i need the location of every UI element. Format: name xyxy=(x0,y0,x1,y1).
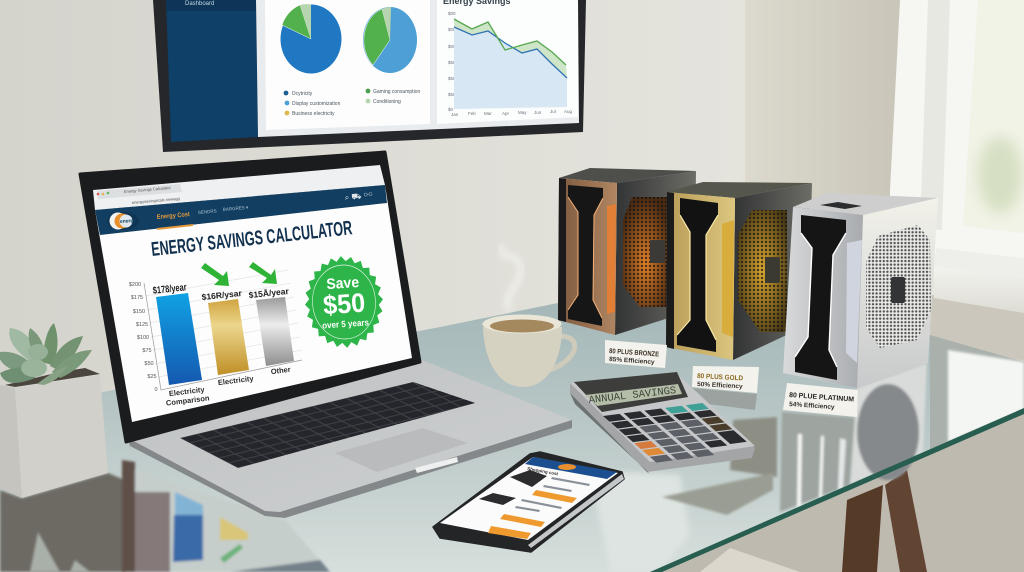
product thumbnail 2 xyxy=(479,493,516,505)
trackpad xyxy=(335,428,468,472)
top xyxy=(793,193,938,215)
PSU platinum xyxy=(783,193,938,388)
label platinum: 80 PLUE PLATINUM xyxy=(789,392,854,404)
laptop base xyxy=(128,360,572,518)
window xyxy=(890,0,1024,313)
monitor content area xyxy=(256,0,579,137)
calculator xyxy=(570,372,756,474)
reflected window shapes xyxy=(30,532,90,572)
grid lines xyxy=(145,270,302,377)
top xyxy=(559,168,696,183)
savings badge xyxy=(302,253,386,351)
category labels: Electricity xyxy=(217,374,255,387)
bar 3 xyxy=(256,297,294,366)
I shape xyxy=(677,198,718,352)
line chart axis labels: $50 xyxy=(448,60,456,65)
LED strip xyxy=(607,204,616,314)
gold PSU reflection xyxy=(662,417,777,515)
PSU bronze xyxy=(558,168,696,335)
platinum PSU reflection xyxy=(780,363,927,512)
concrete pot xyxy=(0,368,108,498)
monitor sidebar xyxy=(166,0,258,142)
lighter streak xyxy=(590,470,690,572)
line chart axis labels: Aug xyxy=(564,109,573,114)
line chart area xyxy=(454,19,567,78)
screen title: ENERGY SAVINGS CALCULATOR xyxy=(150,217,354,261)
gold label reflection xyxy=(692,388,757,410)
nav bar: Energy Cost xyxy=(157,211,191,221)
savings badge: Save xyxy=(326,275,360,293)
glow lines xyxy=(706,215,718,340)
logo: energy xyxy=(120,218,137,225)
axis labels: $200 xyxy=(129,282,141,288)
line chart axis labels xyxy=(448,11,573,117)
front xyxy=(783,207,863,388)
coffee xyxy=(490,320,554,332)
cup handle xyxy=(550,336,575,370)
fan xyxy=(866,225,931,348)
laptop lid bezel xyxy=(80,152,420,442)
pie legend xyxy=(284,89,420,117)
bar values: $178/year xyxy=(152,282,187,297)
phone title: Shopping cost xyxy=(527,466,559,476)
pie legend: Dcytricity xyxy=(292,91,313,97)
bar values: $16R/ysar xyxy=(201,288,243,302)
LCD xyxy=(585,384,682,406)
laptop screen xyxy=(95,185,412,422)
pie chart 2 xyxy=(363,7,417,73)
baseboard xyxy=(700,548,800,572)
table leg xyxy=(885,470,927,572)
glow lines xyxy=(795,233,812,357)
keyboard xyxy=(180,382,475,468)
sidebar label: Dashboard xyxy=(185,1,214,7)
glow lines xyxy=(677,215,690,335)
line chart axis labels: Jul xyxy=(550,109,556,114)
browser chrome: Energy Savings Calculator xyxy=(124,185,172,194)
line chart axis labels: $50 xyxy=(448,92,456,97)
glass lower left dark under pot xyxy=(0,473,125,572)
pie legend: Gaming consumption xyxy=(373,89,420,95)
label bronze: 80 PLUS BRONZE xyxy=(609,348,659,359)
front xyxy=(558,178,617,335)
blue line xyxy=(454,27,567,78)
green line xyxy=(454,19,566,65)
potted plant xyxy=(0,323,108,498)
front notch xyxy=(415,457,458,473)
coffee cup xyxy=(482,245,575,387)
fan xyxy=(623,197,668,307)
vent xyxy=(820,202,862,209)
category labels: Comparison xyxy=(165,393,210,408)
glass front edge xyxy=(650,408,1024,572)
window pane xyxy=(963,0,1024,233)
axis labels: $150 xyxy=(133,309,145,315)
laptop xyxy=(80,152,572,518)
PSU reflections in glass xyxy=(662,363,927,515)
savings badge: $50 xyxy=(322,287,366,321)
side xyxy=(857,198,938,388)
line chart axis labels: Feb xyxy=(468,111,476,116)
table leg xyxy=(842,485,883,572)
pie chart panel xyxy=(265,0,430,130)
label bronze: 85% Efficiency xyxy=(609,356,655,366)
glass desk xyxy=(0,303,1024,572)
category labels: Electricity xyxy=(168,385,206,398)
browser chrome xyxy=(93,165,385,210)
line chart axis labels: $00 xyxy=(448,11,456,16)
label platinum xyxy=(783,383,858,417)
label platinum: 54% Efficiency xyxy=(789,401,835,411)
axis labels: $25 xyxy=(147,374,157,380)
product text xyxy=(515,477,590,512)
smartphone xyxy=(433,452,624,552)
glow lines xyxy=(568,197,578,310)
fan xyxy=(738,210,787,332)
monitor on wall xyxy=(153,0,586,152)
axis labels: $75 xyxy=(142,348,152,354)
I shape xyxy=(568,185,603,326)
product thumbnail 1 xyxy=(510,470,547,487)
badge xyxy=(765,257,780,283)
steam xyxy=(502,245,521,310)
axis labels: 0 xyxy=(154,387,158,393)
buy button 3 xyxy=(488,526,531,539)
I shape xyxy=(795,215,846,380)
phone logo xyxy=(558,464,576,470)
keypad xyxy=(603,403,756,463)
label gold xyxy=(692,366,759,393)
window reflection xyxy=(930,335,1024,455)
floor and table legs xyxy=(650,405,1024,572)
LED strip xyxy=(722,220,734,337)
front xyxy=(666,192,735,360)
display surround xyxy=(574,372,688,412)
label bronze xyxy=(605,340,667,368)
monitor frame xyxy=(153,0,586,152)
phone body xyxy=(433,452,624,552)
label gold: 80 PLUS GOLD xyxy=(697,373,743,382)
pie legend: Display customization xyxy=(292,101,341,107)
axis labels: $100 xyxy=(137,335,149,341)
succulent xyxy=(0,323,92,385)
line chart axis labels: Jan xyxy=(451,112,459,117)
foliage xyxy=(978,137,1022,213)
line chart axis labels: $00 xyxy=(448,27,456,32)
line chart axis labels: Mar xyxy=(484,111,492,116)
cup body xyxy=(483,327,562,387)
category labels xyxy=(165,365,291,408)
bar chart xyxy=(129,270,302,408)
logo xyxy=(107,212,139,230)
badge xyxy=(891,277,905,303)
down arrow 1 xyxy=(201,263,229,286)
top xyxy=(667,182,812,198)
nav bar xyxy=(95,185,387,235)
line chart axis labels: Jun xyxy=(534,110,542,115)
phone screen xyxy=(440,457,618,540)
buy button 1 xyxy=(532,490,577,503)
side xyxy=(733,183,812,360)
bar 1 xyxy=(156,293,202,385)
glow lines xyxy=(593,198,603,318)
line chart axis labels: $00 xyxy=(448,44,456,49)
line chart axis labels: May xyxy=(518,110,527,115)
LED strip xyxy=(846,240,862,363)
bar 2 xyxy=(208,299,249,375)
line chart panel xyxy=(437,0,578,124)
bar values: $15Å/year xyxy=(248,286,290,300)
nav bar: SENDRS xyxy=(198,208,217,215)
nav bar: ⌕ ⛟ ⚯ xyxy=(344,191,373,202)
line chart axis labels: Apr xyxy=(502,111,510,116)
axis labels: $50 xyxy=(144,361,154,367)
laptop reflection xyxy=(122,460,330,572)
line chart axis labels: $0 xyxy=(448,107,454,112)
LCD text: ANNUAL SAVINGS xyxy=(588,385,677,407)
axis labels xyxy=(129,282,158,393)
pie legend: Conditioning xyxy=(373,99,401,105)
axis labels: $125 xyxy=(136,322,148,328)
window sill xyxy=(934,248,1024,278)
bar values xyxy=(152,282,290,302)
PSU gold xyxy=(666,182,812,360)
browser chrome: energysavingscalc.newegg xyxy=(132,196,180,205)
rim xyxy=(482,314,562,334)
label gold: 50% Efficiency xyxy=(697,381,743,390)
line chart axis labels: $50 xyxy=(448,76,456,81)
glow lines xyxy=(829,233,846,367)
reflected bars xyxy=(175,492,203,515)
phone header xyxy=(525,457,617,479)
pie legend: Business electricity xyxy=(292,111,335,117)
down arrow 2 xyxy=(249,262,277,284)
pie chart 1 xyxy=(280,4,342,73)
savings badge: over 5 years xyxy=(322,317,369,331)
buy button 2 xyxy=(500,514,545,527)
badge xyxy=(650,240,665,263)
nav bar: BARGRES ▾ xyxy=(223,205,249,212)
axis labels: $175 xyxy=(131,295,143,301)
phone silver edge xyxy=(528,474,624,548)
side xyxy=(615,171,696,335)
category labels: Other xyxy=(270,365,291,376)
